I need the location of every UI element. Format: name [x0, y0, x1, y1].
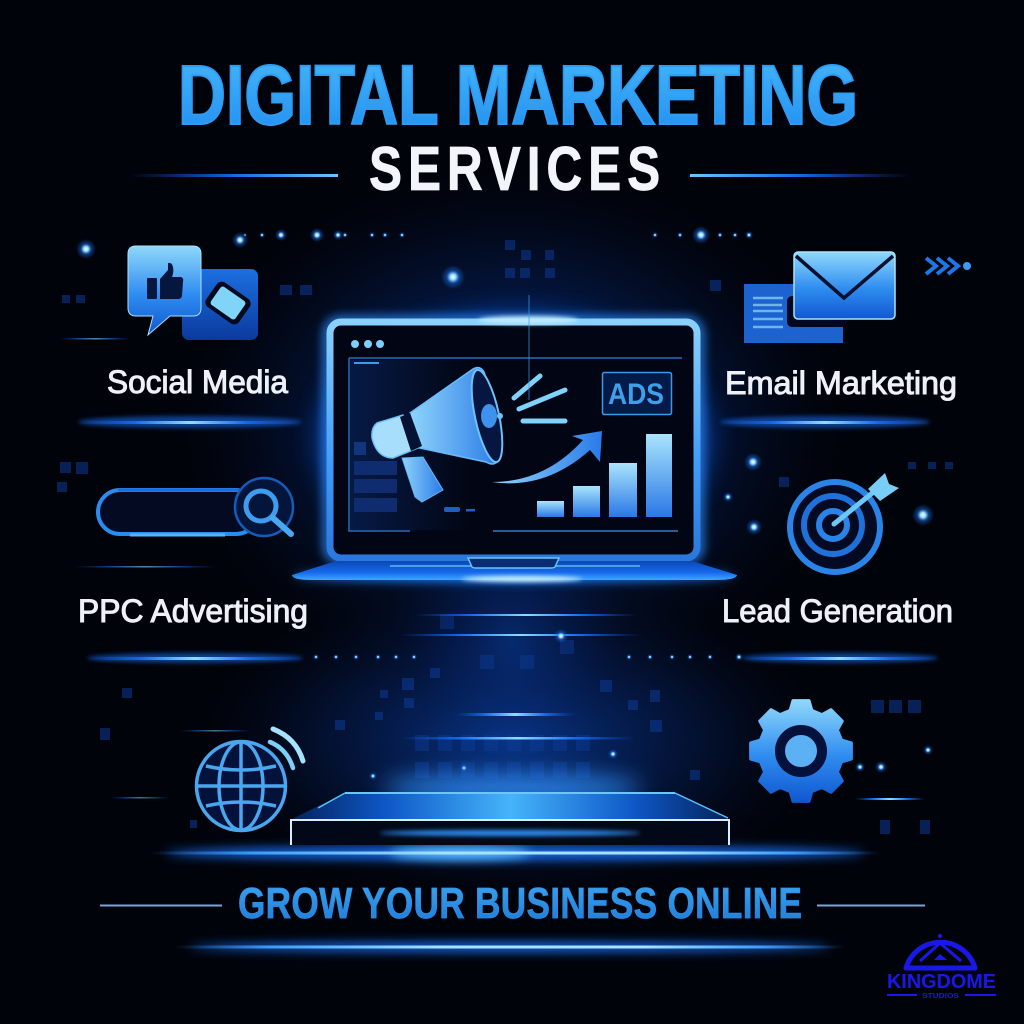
ads badge: ADS	[608, 378, 664, 411]
logo: kingdome studios: KINGDOME	[887, 971, 996, 993]
social like bubble	[128, 246, 201, 335]
tagline: GROW YOUR BUSINESS ONLINE	[238, 879, 802, 928]
title: DIGITAL MARKETING	[178, 48, 858, 142]
icon: gear	[751, 701, 851, 801]
growth arrow	[492, 431, 602, 483]
laptop screen	[330, 322, 697, 558]
icon: social media	[128, 246, 258, 340]
subtitle: SERVICES	[369, 134, 660, 203]
megaphone	[372, 368, 509, 502]
sound lines	[514, 376, 565, 421]
logo: kingdome studios: STUDIOS	[922, 993, 959, 1000]
laptop	[292, 295, 737, 582]
icon: target	[790, 473, 899, 572]
sparkle dots	[76, 226, 934, 780]
chevrons	[926, 258, 969, 274]
document behind envelope	[744, 284, 847, 343]
label: email marketing: Email Marketing	[725, 365, 957, 401]
icon: search bar	[98, 478, 293, 536]
glow divider lines	[60, 174, 938, 952]
logo: kingdome studios	[887, 934, 996, 1000]
label: lead generation: Lead Generation	[722, 593, 953, 629]
icon: email	[744, 252, 969, 343]
platform	[290, 776, 730, 845]
label: social media: Social Media	[107, 364, 288, 400]
label: ppc advertising: PPC Advertising	[78, 593, 308, 629]
bar chart	[537, 434, 672, 517]
top flare	[478, 295, 578, 400]
icon: globe with signal	[196, 729, 303, 830]
envelope	[794, 252, 895, 319]
laptop base	[292, 558, 737, 582]
social back tile with phone	[182, 269, 258, 340]
